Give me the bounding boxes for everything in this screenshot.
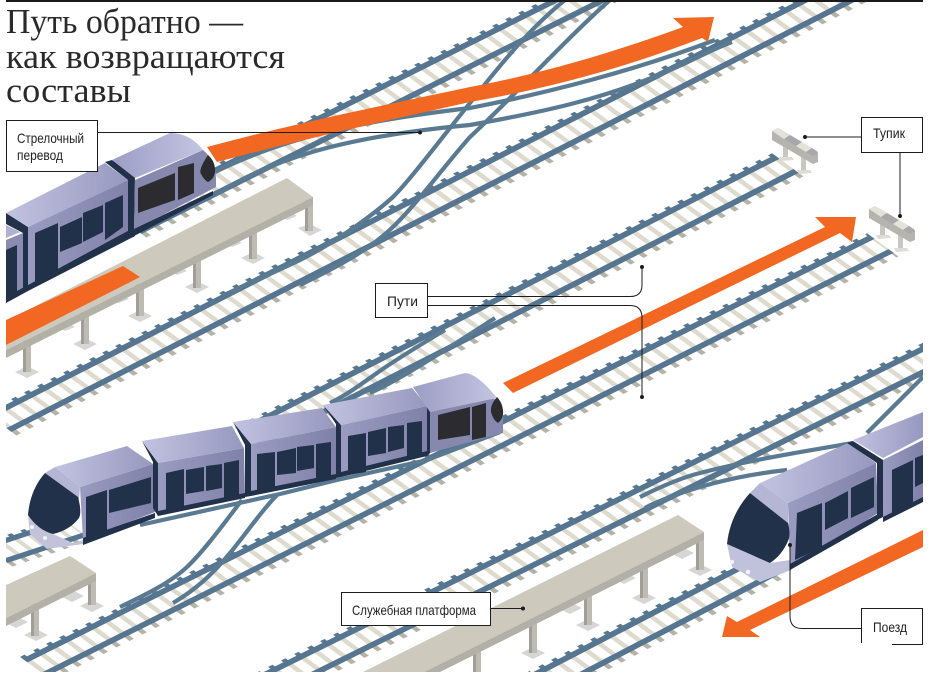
label: Стрелочный перевод bbox=[6, 120, 422, 172]
car 5 rear bbox=[413, 373, 503, 456]
car 1 front bbox=[28, 446, 155, 549]
train: upper left bbox=[6, 133, 216, 303]
platform: lower left bbox=[4, 556, 104, 641]
car 4 bbox=[323, 388, 427, 478]
arrow: middle train direction bbox=[503, 217, 856, 393]
label: Пути bbox=[376, 265, 644, 399]
label: Тупик bbox=[803, 118, 922, 218]
train: lower right bbox=[727, 412, 923, 582]
dead-end barrier: upper bbox=[772, 128, 818, 174]
track: dead-end track E bbox=[23, 236, 895, 677]
train: middle bbox=[28, 373, 503, 549]
label: Поезд bbox=[788, 543, 922, 644]
track: long upper track B bbox=[0, 0, 893, 433]
switch curves bbox=[120, 0, 923, 607]
top rule bbox=[6, 0, 923, 2]
label: Стрелочный перевод: Стрелочный bbox=[17, 130, 84, 146]
track: lower track G bbox=[258, 334, 944, 681]
label: Служебная платформа bbox=[342, 592, 525, 626]
arrow: lower train direction bbox=[722, 530, 923, 637]
car 3 bbox=[233, 408, 336, 497]
title: составы bbox=[6, 71, 131, 110]
label: Стрелочный перевод: перевод bbox=[17, 147, 63, 163]
dead-end barrier: lower bbox=[869, 206, 915, 252]
label: Служебная платформа: Служебная платформа bbox=[352, 602, 476, 618]
label: Тупик: Тупик bbox=[873, 125, 906, 141]
platform: upper left bbox=[6, 178, 322, 378]
track: dead-end track C bbox=[238, 156, 800, 448]
platform: service platform bbox=[347, 515, 712, 681]
label: Поезд: Поезд bbox=[873, 619, 907, 635]
track: top track A bbox=[118, 0, 613, 235]
car 2 bbox=[142, 426, 245, 516]
orange strip on platform bbox=[6, 266, 140, 345]
track: train 3 track H bbox=[528, 556, 783, 681]
title: как возвращаются bbox=[6, 37, 285, 76]
label: Пути: Пути bbox=[387, 293, 418, 309]
track: train 2 track D bbox=[6, 525, 83, 566]
title: Путь обратно — bbox=[6, 2, 244, 41]
arrow: upper train direction bbox=[207, 17, 714, 162]
title bbox=[6, 2, 285, 110]
